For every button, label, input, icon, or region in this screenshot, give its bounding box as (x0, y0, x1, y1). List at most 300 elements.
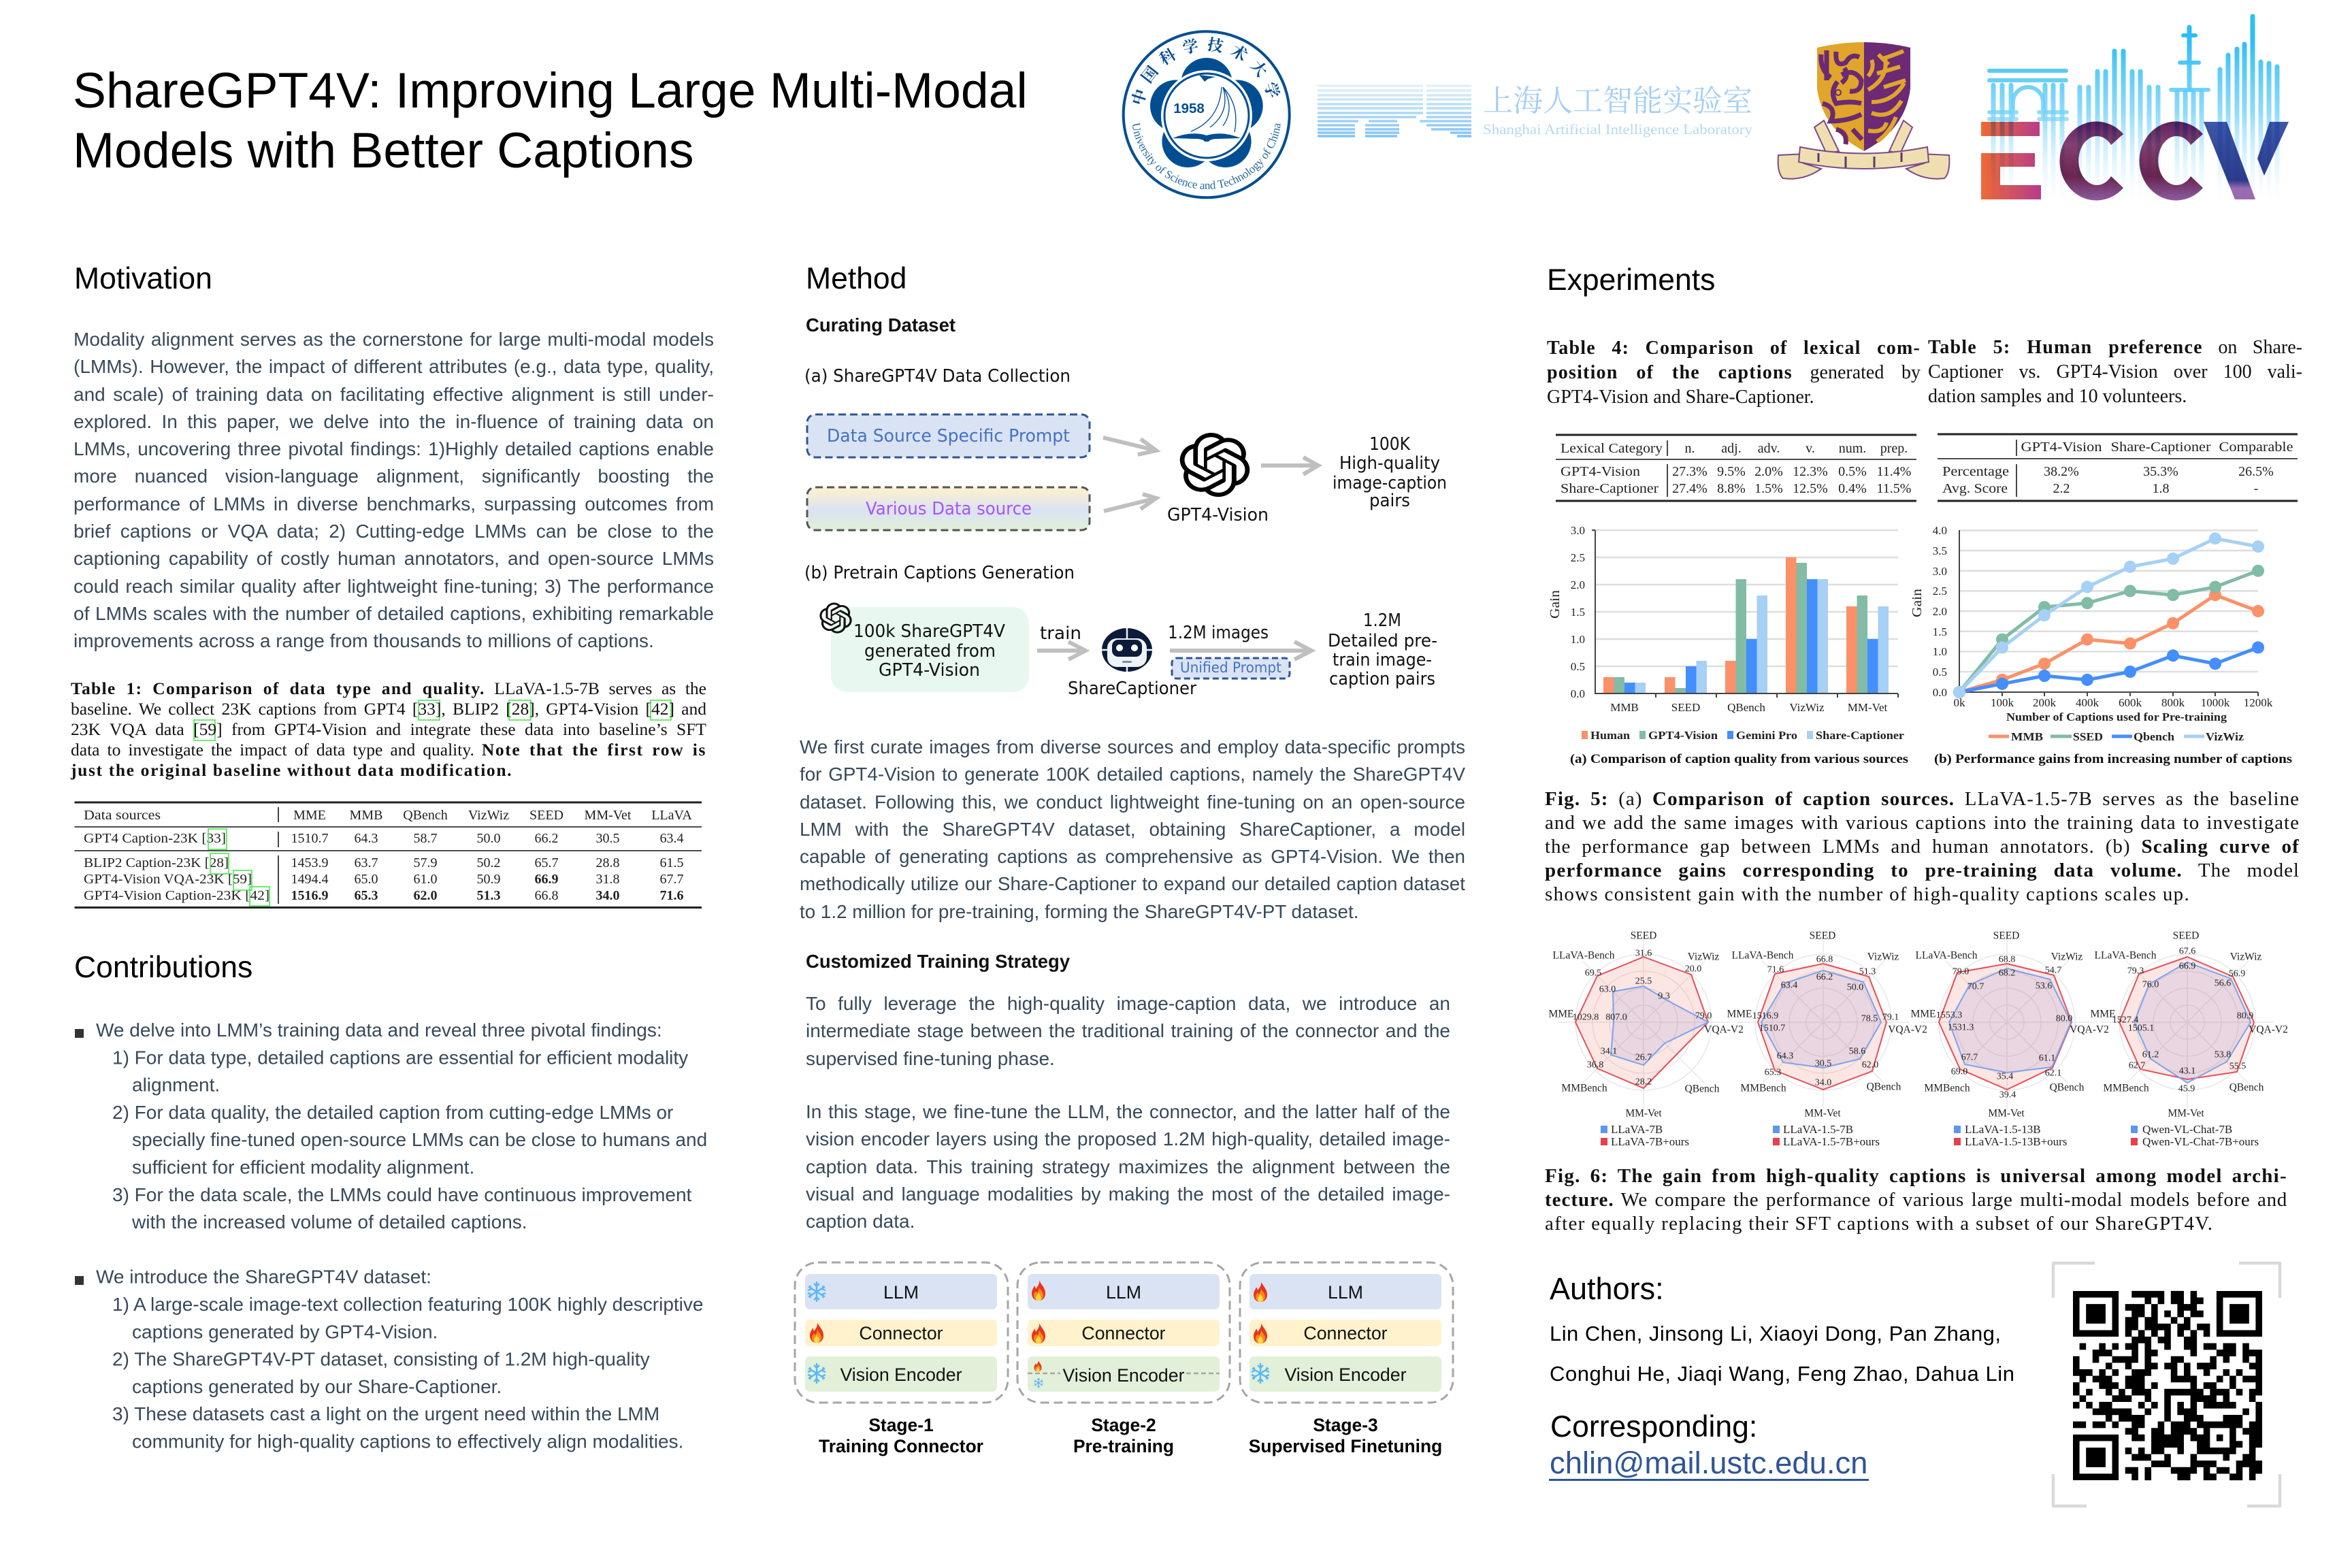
table 5 caption: dation samples and 10 volunteers. (1928, 386, 2187, 407)
radar chart: LLaVA-1.5-7B: 66.2 (1816, 972, 1833, 983)
contributions text: sufficient for efficient modality alignment. (132, 1157, 474, 1177)
contributions text: 1) A large-scale image-text collection featuring 100K highly descriptive (112, 1294, 703, 1315)
table 5: Share-Captioner (2111, 440, 2211, 455)
legend: Human (1590, 729, 1631, 742)
figure 5 caption: shows consistent gain with the number of high-quality captions scales up. (1545, 883, 2190, 905)
stage 2 (1017, 1262, 1230, 1456)
diagram: data collection (804, 366, 1447, 530)
radar chart: LLaVA-1.5-7B: MM-Vet (1804, 1108, 1841, 1119)
table 1: 65.3 (354, 888, 378, 903)
radar chart: LLaVA-1.5-7B: MME (1727, 1009, 1752, 1019)
table 4: 27.3% (1672, 464, 1708, 479)
motivation paragraph (74, 329, 714, 651)
output label: 100K (1369, 434, 1411, 455)
radar chart: Qwen-VL-Chat-7B: 56.9 (2229, 969, 2245, 979)
radar chart: LLaVA-7B: MM-Vet (1625, 1108, 1662, 1119)
radar chart: LLaVA-7B: 69.5 (1585, 968, 1601, 979)
table 1: 30.5 (596, 831, 619, 846)
table 4: v. (1806, 441, 1815, 456)
radar legends: LLaVA-7B+ours (1611, 1135, 1689, 1148)
line chart: performance gains: 3.5 (1933, 544, 1947, 557)
table 4: adv. (1758, 441, 1780, 456)
table 4: 0.4% (1838, 481, 1867, 496)
table 1: 65.7 (535, 855, 558, 870)
table 1 caption: just the original baseline without data modification. (71, 760, 512, 780)
radar chart: LLaVA-1.5-13B: 1531.3 (1948, 1022, 1974, 1033)
stage 1: Training Connector (819, 1436, 983, 1456)
icon: small OpenAI logo (819, 603, 852, 634)
table 1: 71.6 (660, 888, 683, 903)
legend: MMB (2011, 730, 2043, 743)
table 4: num. (1839, 441, 1866, 456)
bar chart: caption quality: QBench (1727, 701, 1765, 714)
method paragraph 3 (806, 1101, 1450, 1232)
table 1 caption: Table 1: Comparison of data type and quality. LLaVA-1.5-7B serves as the (71, 679, 706, 698)
table 5: GPT4-Vision (2021, 440, 2102, 455)
table 1: 1453.9 (291, 855, 328, 870)
authors: Authors: (1550, 1271, 1664, 1306)
line chart: performance gains (1910, 524, 2292, 766)
table 1: 65.0 (354, 872, 378, 887)
diagram: pretrain captions: (b) Pretrain Captions Generation (804, 563, 1075, 583)
table 5: 2.2 (2053, 481, 2070, 496)
radar chart: LLaVA-1.5-13B: 35.4 (1997, 1071, 2013, 1082)
stage 1 (795, 1262, 1008, 1456)
output label: High-quality (1339, 453, 1440, 474)
stage 3: Stage-3 (1313, 1415, 1378, 1435)
radar chart: Qwen-VL-Chat-7B: MME (2090, 1009, 2116, 1019)
radar chart: Qwen-VL-Chat-7B: 61.2 (2142, 1049, 2159, 1060)
motivation paragraph: improvements across a range from thousands to millions of captions. (74, 630, 654, 651)
table 4 caption: position of the captions generated by (1547, 362, 1921, 383)
table 1: 1494.4 (291, 872, 328, 887)
bullet (75, 1029, 84, 1038)
table 5 caption (1928, 337, 2302, 407)
radar chart: LLaVA-7B: QBench (1685, 1083, 1720, 1094)
contributions text: captions generated by our Share-Captioner. (132, 1376, 502, 1397)
radar chart: Qwen-VL-Chat-7B: MM-Vet (2168, 1108, 2204, 1119)
heading: Method: Method (806, 262, 906, 295)
box: ShareGPT4V source: generated from (864, 641, 996, 662)
table 4: 0.5% (1838, 464, 1867, 479)
table 4 caption: GPT4-Vision and Share-Captioner. (1547, 387, 1814, 408)
radar chart: LLaVA-1.5-7B: VizWiz (1867, 951, 1899, 962)
radar chart: LLaVA-1.5-13B: 80.0 (2056, 1014, 2072, 1024)
table 1: 1510.7 (291, 831, 328, 846)
table 1: 34.0 (596, 888, 619, 903)
method paragraph 2: supervised fine-tuning phase. (806, 1048, 1055, 1069)
table 1: MMB (350, 808, 382, 823)
legend: Gemini Pro (1736, 729, 1797, 742)
method paragraph 1: LMM with the ShareGPT4V dataset, obtaining ShareCaptioner, a model (800, 819, 1465, 840)
logo: Shanghai AI Laboratory: Shanghai Artificial Intelligence Laboratory (1483, 121, 1753, 137)
table 4: n. (1685, 441, 1695, 456)
table 1: 50.9 (476, 872, 501, 887)
table 1: QBench (403, 808, 448, 823)
table 1: Data sources (84, 808, 161, 823)
table 4: 12.3% (1793, 464, 1828, 479)
corresponding contact (1549, 1410, 1869, 1481)
table 5: 1.8 (2152, 481, 2170, 496)
figure 5 caption: Fig. 5: (a) Comparison of caption sources. LLaVA-1.5-7B serves as the baseline (1545, 788, 2300, 810)
chart caption: (a) Comparison of caption quality from various sources (1570, 752, 1908, 766)
table 1: GPT4-Vision Caption-23K [42] (84, 888, 270, 903)
radar chart: LLaVA-7B: 1029.8 (1573, 1013, 1599, 1022)
radar chart: LLaVA-1.5-7B: 79.1 (1882, 1013, 1899, 1022)
radar chart: LLaVA-1.5-7B: SEED (1810, 930, 1835, 942)
motivation paragraph: of LMMs scales with the number of detailed captions, exhibiting remarkable (74, 603, 714, 624)
table 4: prep. (1880, 441, 1908, 456)
legend: Share-Captioner (1816, 729, 1904, 742)
arrows into GPT4-Vision (1103, 438, 1156, 511)
bar chart: caption quality: VizWiz (1789, 701, 1825, 714)
motivation paragraph: LMMs, uncovering three pivotal findings: 1)Highly detailed captions enable (74, 438, 714, 459)
radar chart: LLaVA-1.5-7B: VQA-V2 (1888, 1024, 1927, 1036)
box: ShareGPT4V source: 100k ShareGPT4V (853, 621, 1005, 642)
bar chart: caption quality: 2.0 (1571, 578, 1585, 591)
method paragraph 3: visual and language modalities by making the most of the detailed image- (806, 1183, 1450, 1205)
radar chart: LLaVA-1.5-7B: 51.3 (1859, 966, 1876, 977)
radar chart: LLaVA-7B: 25.5 (1635, 976, 1652, 987)
figure 6 caption: after equally replacing their SFT captions with a subset of our ShareGPT4V. (1545, 1213, 2213, 1235)
method paragraph 1: to 1.2 million for pre-training, forming the ShareGPT4V-PT dataset. (800, 901, 1358, 922)
radar chart: LLaVA-7B: 36.8 (1587, 1060, 1603, 1070)
table 1: MME (293, 808, 326, 823)
radar chart: Qwen-VL-Chat-7B: MMBench (2103, 1082, 2149, 1094)
table 4: 12.5% (1793, 481, 1828, 496)
radar chart: LLaVA-1.5-7B: 62.0 (1862, 1060, 1878, 1070)
contributions text: with the increased volume of detailed captions. (131, 1211, 527, 1232)
icon: OpenAI logo (1180, 433, 1250, 497)
radar chart: LLaVA-1.5-13B: SEED (1993, 930, 2019, 942)
table 4: adj. (1721, 441, 1742, 456)
table 1: 31.8 (596, 872, 619, 887)
radar chart: LLaVA-1.5-7B (1727, 930, 1927, 1119)
table 4 (1556, 435, 1916, 501)
box: ShareGPT4V source: GPT4-Vision (879, 660, 980, 681)
radar chart: LLaVA-7B (1548, 930, 1744, 1119)
table 1: 61.5 (660, 855, 683, 870)
radar chart: Qwen-VL-Chat-7B: 1505.1 (2128, 1024, 2154, 1033)
table 4: Share-Captioner (1561, 481, 1659, 496)
radar chart: LLaVA-1.5-7B: 50.0 (1847, 983, 1863, 992)
output label: train image- (1333, 650, 1432, 670)
contributions text: specially fine-tuned open-source LMMs can be close to humans and (132, 1129, 707, 1150)
motivation paragraph: explored. In this paper, we delve into the in-fluence of training data on (74, 411, 714, 432)
radar chart: LLaVA-1.5-13B: QBench (2050, 1082, 2085, 1093)
radar chart: LLaVA-1.5-7B: 64.3 (1777, 1051, 1793, 1062)
arrow (1170, 642, 1311, 659)
table 1: BLIP2 Caption-23K [28] (84, 855, 229, 870)
table 1: 28.8 (596, 855, 619, 870)
method paragraph 1: capable of generating captions as comprehensive as GPT4-Vision. We then (800, 846, 1465, 867)
radar chart: LLaVA-1.5-7B: 34.0 (1815, 1078, 1831, 1088)
table 1: MM-Vet (585, 808, 632, 823)
radar chart: LLaVA-7B: VizWiz (1688, 951, 1719, 962)
radar chart: Qwen-VL-Chat-7B: 43.1 (2179, 1066, 2195, 1077)
stage 1: Connector (859, 1323, 943, 1343)
logo: Shanghai AI Laboratory (1318, 84, 1753, 137)
diagram: pretrain captions: train (1040, 623, 1081, 644)
method paragraph 2: To fully leverage the high-quality image-caption data, we introduce an (806, 993, 1450, 1014)
table 5: Comparable (2219, 440, 2293, 455)
letter E (1981, 122, 2041, 199)
radar chart: LLaVA-1.5-13B (1910, 930, 2109, 1119)
contributions text: community for high-quality captions to effectively align modalities. (132, 1431, 683, 1452)
table 4 caption (1547, 338, 1921, 408)
line chart: performance gains: 400k (2076, 696, 2099, 709)
method paragraph 3: vision encoder layers using the proposed 1.2M high-quality, detailed image- (806, 1128, 1450, 1149)
table 1: 66.9 (535, 872, 558, 887)
table 4: Lexical Category (1561, 441, 1663, 456)
contributions text: alignment. (132, 1075, 220, 1096)
radar chart: Qwen-VL-Chat-7B: QBench (2230, 1082, 2264, 1093)
radar chart: LLaVA-1.5-7B: 78.5 (1861, 1014, 1878, 1024)
radar chart: LLaVA-1.5-7B: MMBench (1740, 1082, 1786, 1094)
radar chart: LLaVA-7B: 63.0 (1599, 984, 1616, 995)
bar chart: caption quality: 1.0 (1571, 633, 1585, 646)
line chart: performance gains: 1200k (2244, 696, 2273, 709)
stage 3: Supervised Finetuning (1249, 1436, 1442, 1456)
radar chart: LLaVA-7B: SEED (1631, 930, 1656, 942)
radar chart: LLaVA-1.5-13B: 54.7 (2045, 965, 2061, 976)
table 5: 38.2% (2044, 464, 2079, 479)
table 4: 1.5% (1754, 481, 1783, 496)
radar chart: LLaVA-1.5-13B: 39.4 (1999, 1090, 2016, 1100)
radar chart: Qwen-VL-Chat-7B: 76.0 (2142, 980, 2159, 990)
radar chart: LLaVA-1.5-13B: LLaVA-Bench (1916, 950, 1978, 961)
bullet (75, 1276, 84, 1285)
letter V (2204, 122, 2289, 199)
radar chart: LLaVA-1.5-7B: 71.6 (1767, 965, 1784, 975)
radar legends (1601, 1123, 2259, 1148)
output label (1333, 434, 1447, 511)
bar chart: caption quality: 1.5 (1571, 606, 1585, 619)
motivation paragraph: more nuanced vision-language alignment, significantly boosting the (74, 466, 714, 487)
line chart: performance gains: 200k (2033, 696, 2057, 709)
bar chart: caption quality: SEED (1671, 701, 1700, 714)
figure 6 caption (1545, 1165, 2287, 1235)
table 4: 11.4% (1877, 464, 1911, 479)
table 1: 63.7 (354, 855, 378, 870)
line chart: performance gains: 1.0 (1933, 645, 1947, 658)
line chart: performance gains: 4.0 (1933, 524, 1947, 537)
radar chart: LLaVA-1.5-7B: 65.3 (1765, 1067, 1781, 1078)
radar chart: LLaVA-7B: 28.2 (1635, 1077, 1652, 1088)
second letter C (2139, 121, 2203, 200)
stage 3: Connector (1303, 1323, 1388, 1343)
arrow (1037, 642, 1085, 659)
table 1: GPT4-Vision VQA-23K [59] (84, 872, 252, 887)
stage 2: Pre-training (1073, 1436, 1174, 1456)
table 4: 8.8% (1717, 481, 1746, 496)
radar chart: LLaVA-7B: 20.0 (1685, 964, 1701, 975)
radar chart: LLaVA-1.5-13B: 62.1 (2045, 1068, 2061, 1078)
radar chart: LLaVA-1.5-7B: QBench (1867, 1081, 1901, 1093)
radar chart: Qwen-VL-Chat-7B: 55.5 (2230, 1062, 2246, 1071)
table 5 caption: Captioner vs. GPT4-Vision over 100 vali- (1928, 361, 2302, 382)
stage 1: LLM (883, 1282, 919, 1303)
radar chart: LLaVA-1.5-7B: 58.6 (1849, 1047, 1865, 1056)
heading: Customized Training Strategy: Customized Training Strategy (806, 951, 1071, 972)
training stages (795, 1262, 1453, 1456)
legend: VizWiz (2206, 730, 2244, 743)
radar legends: LLaVA-1.5-13B+ours (1965, 1135, 2067, 1148)
table 1 caption: baseline. We collect 23K captions from GPT4 [33], BLIP2 [28], GPT4-Vision [42] and (71, 699, 706, 719)
table 1 caption (71, 679, 706, 780)
radar chart: LLaVA-1.5-13B: 67.7 (1961, 1052, 1978, 1063)
output label: caption pairs (1329, 669, 1435, 689)
radar chart: LLaVA-7B: 31.6 (1635, 949, 1652, 958)
method paragraph 2: intermediate stage between the traditional training of the connector and the (806, 1020, 1450, 1041)
logo: ECCV (1981, 16, 2289, 200)
radar chart: Qwen-VL-Chat-7B: VQA-V2 (2249, 1024, 2288, 1036)
radar chart: Qwen-VL-Chat-7B: 62.7 (2129, 1060, 2145, 1071)
figure 5 caption: performance gains corresponding to pre-training data volume. The model (1545, 860, 2300, 881)
radar chart: LLaVA-1.5-13B: 1553.3 (1936, 1010, 1962, 1021)
diagram: pretrain captions: 1.2M images (1168, 623, 1269, 643)
arrow (1261, 457, 1318, 474)
radar chart: Qwen-VL-Chat-7B (2090, 930, 2288, 1119)
table 1: 66.8 (535, 888, 558, 903)
motivation paragraph: could reach similar quality after lightweight fine-tuning; 3) The performance (74, 576, 714, 597)
table 5: Avg. Score (1942, 481, 2008, 496)
heading: Motivation: Motivation (74, 262, 212, 295)
box: data source specific prompt (807, 414, 1090, 457)
table 1 (75, 700, 702, 908)
radar chart: Qwen-VL-Chat-7B: SEED (2173, 930, 2199, 942)
radar chart: Qwen-VL-Chat-7B: 80.9 (2237, 1011, 2253, 1021)
method paragraph 1: methodically utilize our Share-Captioner to expand our detailed caption dataset (800, 873, 1465, 894)
bar chart: caption quality: MMB (1610, 701, 1639, 714)
table 4: 2.0% (1754, 464, 1783, 479)
motivation paragraph: and scale) of training data on facilitating effective alignment is still under- (74, 384, 714, 405)
line chart: performance gains: 0.5 (1933, 666, 1947, 679)
radar chart: LLaVA-1.5-13B: 69.0 (1951, 1067, 1967, 1077)
stage 1: Vision Encoder (840, 1365, 962, 1385)
radar chart: LLaVA-1.5-7B: 1516.9 (1752, 1011, 1778, 1021)
skyline (1989, 16, 2277, 197)
table 5 caption: Table 5: Human preference on Share- (1928, 337, 2302, 358)
radar chart: LLaVA-1.5-13B: VQA-V2 (2070, 1024, 2109, 1036)
radar legends: LLaVA-7B (1611, 1123, 1663, 1136)
table 5: 35.3% (2143, 464, 2178, 479)
line chart: performance gains: 800k (2161, 696, 2185, 709)
radar chart: LLaVA-1.5-7B: LLaVA-Bench (1732, 950, 1794, 961)
table 5 (1938, 434, 2298, 501)
stage 3 (1240, 1262, 1453, 1456)
radar chart: LLaVA-7B: 26.7 (1635, 1052, 1652, 1063)
heading: Curating Dataset: Curating Dataset (806, 314, 956, 336)
diagram: data collection: GPT4-Vision (1167, 505, 1269, 525)
table 1: 62.0 (414, 888, 437, 903)
output label: pairs (1369, 491, 1410, 511)
stage 2: Vision Encoder (1062, 1365, 1185, 1386)
stage 3: LLM (1328, 1282, 1363, 1303)
line chart: performance gains: 100k (1991, 696, 2014, 709)
motivation paragraph: captioning capability of costly human annotators, and open-source LMMs (74, 548, 714, 569)
diagram: pretrain captions (804, 563, 1437, 699)
stage 2: LLM (1106, 1282, 1141, 1303)
output label: 1.2M (1363, 610, 1401, 631)
table 1: 61.0 (414, 872, 437, 887)
radar chart: LLaVA-7B: MMBench (1561, 1082, 1607, 1094)
title: ShareGPT4V: Improving Large Multi-Modal (73, 63, 1028, 118)
figure 5 caption (1545, 788, 2300, 905)
logo: USTC: 中国科学技术大学 (1131, 37, 1281, 104)
icon: robot (1102, 628, 1152, 672)
radar chart: LLaVA-1.5-13B: VizWiz (2051, 951, 2082, 962)
contributions text: We introduce the ShareGPT4V dataset: (96, 1267, 431, 1288)
box: unified prompt: Unified Prompt (1180, 659, 1281, 676)
authors: Conghui He, Jiaqi Wang, Feng Zhao, Dahua Lin (1550, 1362, 2014, 1386)
bar chart: caption quality: MM-Vet (1848, 701, 1888, 714)
method paragraph 2 (806, 993, 1450, 1069)
title: Models with Better Captions (73, 122, 694, 178)
radar chart: LLaVA-1.5-7B: 66.8 (1816, 954, 1833, 965)
contributions text: 2) For data quality, the detailed caption from cutting-edge LMMs or (112, 1102, 673, 1123)
radar chart: Qwen-VL-Chat-7B: 66.9 (2179, 961, 2195, 972)
table 1: 66.2 (535, 831, 558, 846)
letter C (2059, 121, 2123, 200)
line chart: performance gains: 0k (1953, 696, 1965, 709)
logo: Shanghai AI Laboratory: 上海人工智能实验室 (1483, 84, 1752, 118)
output label (1328, 610, 1437, 689)
radar chart: LLaVA-1.5-13B: MME (1910, 1009, 1936, 1019)
radar chart: LLaVA-7B: LLaVA-Bench (1553, 950, 1615, 961)
stage 1: Stage-1 (868, 1415, 934, 1435)
legend: GPT4-Vision (1648, 729, 1718, 742)
radar chart: Qwen-VL-Chat-7B: 67.6 (2179, 946, 2195, 957)
radar chart: LLaVA-1.5-7B: 63.4 (1781, 980, 1797, 991)
box: various data source (807, 487, 1090, 530)
stage 2: Connector (1081, 1323, 1166, 1343)
heading: Contributions: Contributions (74, 951, 252, 984)
corresponding contact: Corresponding: (1550, 1410, 1757, 1443)
radar chart: LLaVA-7B: 79.0 (1695, 1011, 1712, 1021)
table 5: - (2254, 481, 2258, 496)
authors: Lin Chen, Jinsong Li, Xiaoyi Dong, Pan Zhang, (1550, 1322, 2001, 1345)
table 4: 27.4% (1672, 481, 1708, 496)
bar chart: caption quality: 2.5 (1571, 551, 1585, 564)
radar chart: LLaVA-7B: 9.3 (1658, 991, 1670, 1002)
radar chart: Qwen-VL-Chat-7B: LLaVA-Bench (2095, 950, 2157, 961)
line chart: performance gains: Gain (1910, 589, 1925, 617)
bar chart: caption quality: Gain (1548, 590, 1563, 619)
line chart: performance gains: 3.0 (1933, 565, 1947, 578)
figure 6 caption: tecture. We compare the performance of various large multi-modal models before and (1545, 1189, 2287, 1211)
corresponding contact: chlin@mail.ustc.edu.cn (1550, 1446, 1867, 1480)
legend: Qbench (2134, 730, 2175, 743)
motivation paragraph: (LMMs). However, the impact of different attributes (e.g., data type, quality, (74, 356, 714, 377)
method paragraph 3: caption data. (806, 1211, 915, 1232)
radar chart: Qwen-VL-Chat-7B: 79.3 (2127, 966, 2144, 976)
radar legends: LLaVA-1.5-7B+ours (1783, 1135, 1880, 1148)
table 4: GPT4-Vision (1561, 464, 1640, 479)
method paragraph 3: In this stage, we fine-tune the LLM, the connector, and the latter half of the (806, 1101, 1450, 1122)
chart caption: (b) Performance gains from increasing number of captions (1934, 752, 2292, 766)
table 1: 63.4 (660, 831, 683, 846)
figure 6 caption: Fig. 6: The gain from high-quality captions is universal among model archi- (1545, 1165, 2287, 1187)
method paragraph 1: We first curate images from diverse sources and employ data-specific prompts (800, 736, 1465, 757)
line chart: performance gains: Number of Captions used for Pre-training (2006, 710, 2227, 723)
line chart: performance gains: 2.5 (1933, 585, 1947, 598)
figure 5 caption: the performance gap between LMMs and human annotators. (b) Scaling curve of (1545, 836, 2300, 858)
logo: CUHK crest (1778, 42, 1949, 179)
box: data source specific prompt: Data Source Specific Prompt (827, 426, 1070, 446)
QR code (2053, 1263, 2280, 1506)
stage 2: Stage-2 (1091, 1415, 1156, 1435)
